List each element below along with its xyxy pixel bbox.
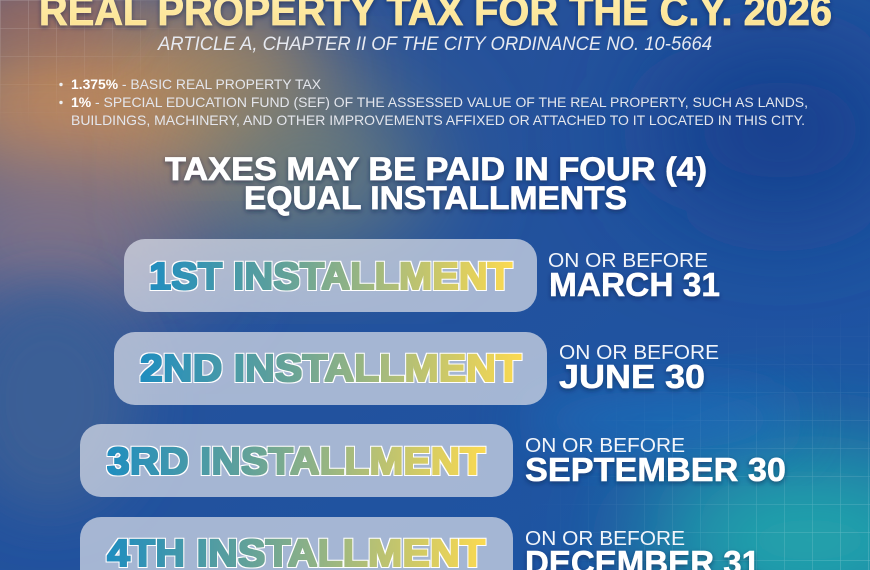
4th installment row <box>80 517 760 570</box>
tax rates list: 1.375% - BASIC REAL PROPERTY TAX <box>71 76 322 92</box>
1st installment row: 1ST INSTALLMENT <box>149 256 512 298</box>
2nd installment row: ON OR BEFORE <box>559 342 719 364</box>
2nd installment row: 2ND INSTALLMENT <box>140 348 521 390</box>
2nd installment row <box>114 332 719 405</box>
3rd installment row: SEPTEMBER 30 <box>525 451 786 488</box>
4th installment row: ON OR BEFORE <box>525 528 685 550</box>
2nd installment row: JUNE 30 <box>559 358 705 395</box>
3rd installment row <box>80 424 786 497</box>
heading: four installments: TAXES MAY BE PAID IN FOUR (4) <box>165 151 707 187</box>
1st installment row <box>124 239 720 312</box>
3rd installment row: 3RD INSTALLMENT <box>107 441 485 483</box>
1st installment row: ON OR BEFORE <box>548 250 708 272</box>
1st installment row: MARCH 31 <box>549 266 720 303</box>
tax rates list <box>59 76 808 128</box>
3rd installment row: ON OR BEFORE <box>525 435 685 457</box>
heading: four installments <box>165 151 707 216</box>
subtitle: ARTICLE A, CHAPTER II OF THE CITY ORDINANCE NO. 10-5664 <box>157 34 712 55</box>
tax rates list: BUILDINGS, MACHINERY, AND OTHER IMPROVEMENTS AFFIXED OR ATTACHED TO IT LOCATED IN THIS CITY. <box>71 112 805 128</box>
heading: four installments: EQUAL INSTALLMENTS <box>244 180 627 216</box>
tax rates list: 1% - SPECIAL EDUCATION FUND (SEF) OF THE ASSESSED VALUE OF THE REAL PROPERTY, SUCH AS LANDS, <box>71 94 808 110</box>
